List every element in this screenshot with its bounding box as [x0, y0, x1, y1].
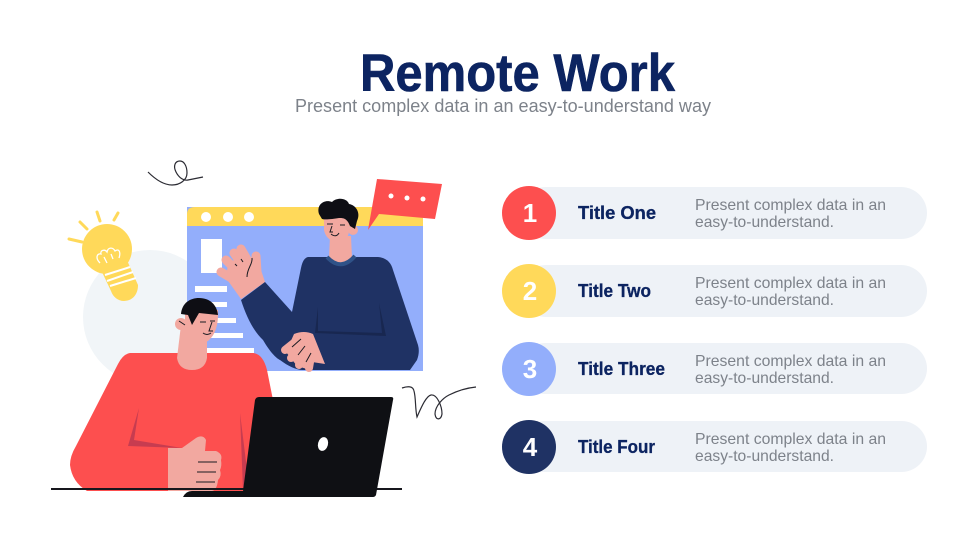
number 2: 2 [523, 276, 537, 306]
list item 3 [502, 342, 927, 396]
text 3: Present complex data in an [695, 353, 886, 370]
pill 2 [520, 265, 927, 317]
desk line [51, 488, 402, 490]
seated person [70, 298, 273, 491]
video call window [187, 207, 423, 371]
text 4: easy-to-understand. [695, 448, 834, 465]
background circle [83, 250, 217, 384]
subtitle: Present complex data in an easy-to-understand way [295, 96, 711, 116]
squiggle top [148, 161, 203, 185]
speech bubble [368, 179, 442, 230]
number badge 4 [502, 420, 556, 474]
person on screen [221, 199, 419, 370]
window title bar [187, 207, 423, 226]
number 4: 4 [523, 432, 538, 462]
number 1: 1 [523, 198, 537, 228]
waving hand [221, 249, 265, 299]
pill 1 [520, 187, 927, 239]
text 1: easy-to-understand. [695, 214, 834, 231]
text 1: Present complex data in an [695, 197, 886, 214]
neck [329, 236, 352, 263]
icon: light bulb [69, 212, 138, 301]
text 2: Present complex data in an [695, 275, 886, 292]
pill 4 [520, 421, 927, 472]
heading 1: Title One [578, 203, 656, 223]
squiggle right [402, 387, 476, 419]
head [175, 298, 218, 343]
head [318, 199, 358, 242]
heading 2: Title Two [578, 281, 651, 301]
list item 4 [502, 420, 927, 474]
heading 3: Title Three [578, 359, 665, 379]
text 4: Present complex data in an [695, 431, 886, 448]
navy sweater [241, 257, 419, 370]
sweater folds [315, 303, 386, 336]
red sweater [70, 353, 273, 491]
illustration: remote video call [51, 161, 476, 497]
collar [327, 256, 355, 264]
hand [168, 436, 221, 491]
neck [177, 325, 207, 370]
list item 1 [502, 186, 927, 240]
number 3: 3 [523, 354, 537, 384]
heading 4: Title Four [578, 437, 655, 457]
lower hand [285, 332, 325, 370]
number badge 2 [502, 264, 556, 318]
text 3: easy-to-understand. [695, 370, 834, 387]
window content blocks [195, 239, 254, 353]
laptop [183, 397, 393, 497]
sweater shadows [128, 408, 247, 490]
list item 2 [502, 264, 927, 318]
number badge 3 [502, 342, 556, 396]
text 2: easy-to-understand. [695, 292, 834, 309]
number badge 1 [502, 186, 556, 240]
pill 3 [520, 343, 927, 394]
title: Remote Work [360, 44, 675, 103]
